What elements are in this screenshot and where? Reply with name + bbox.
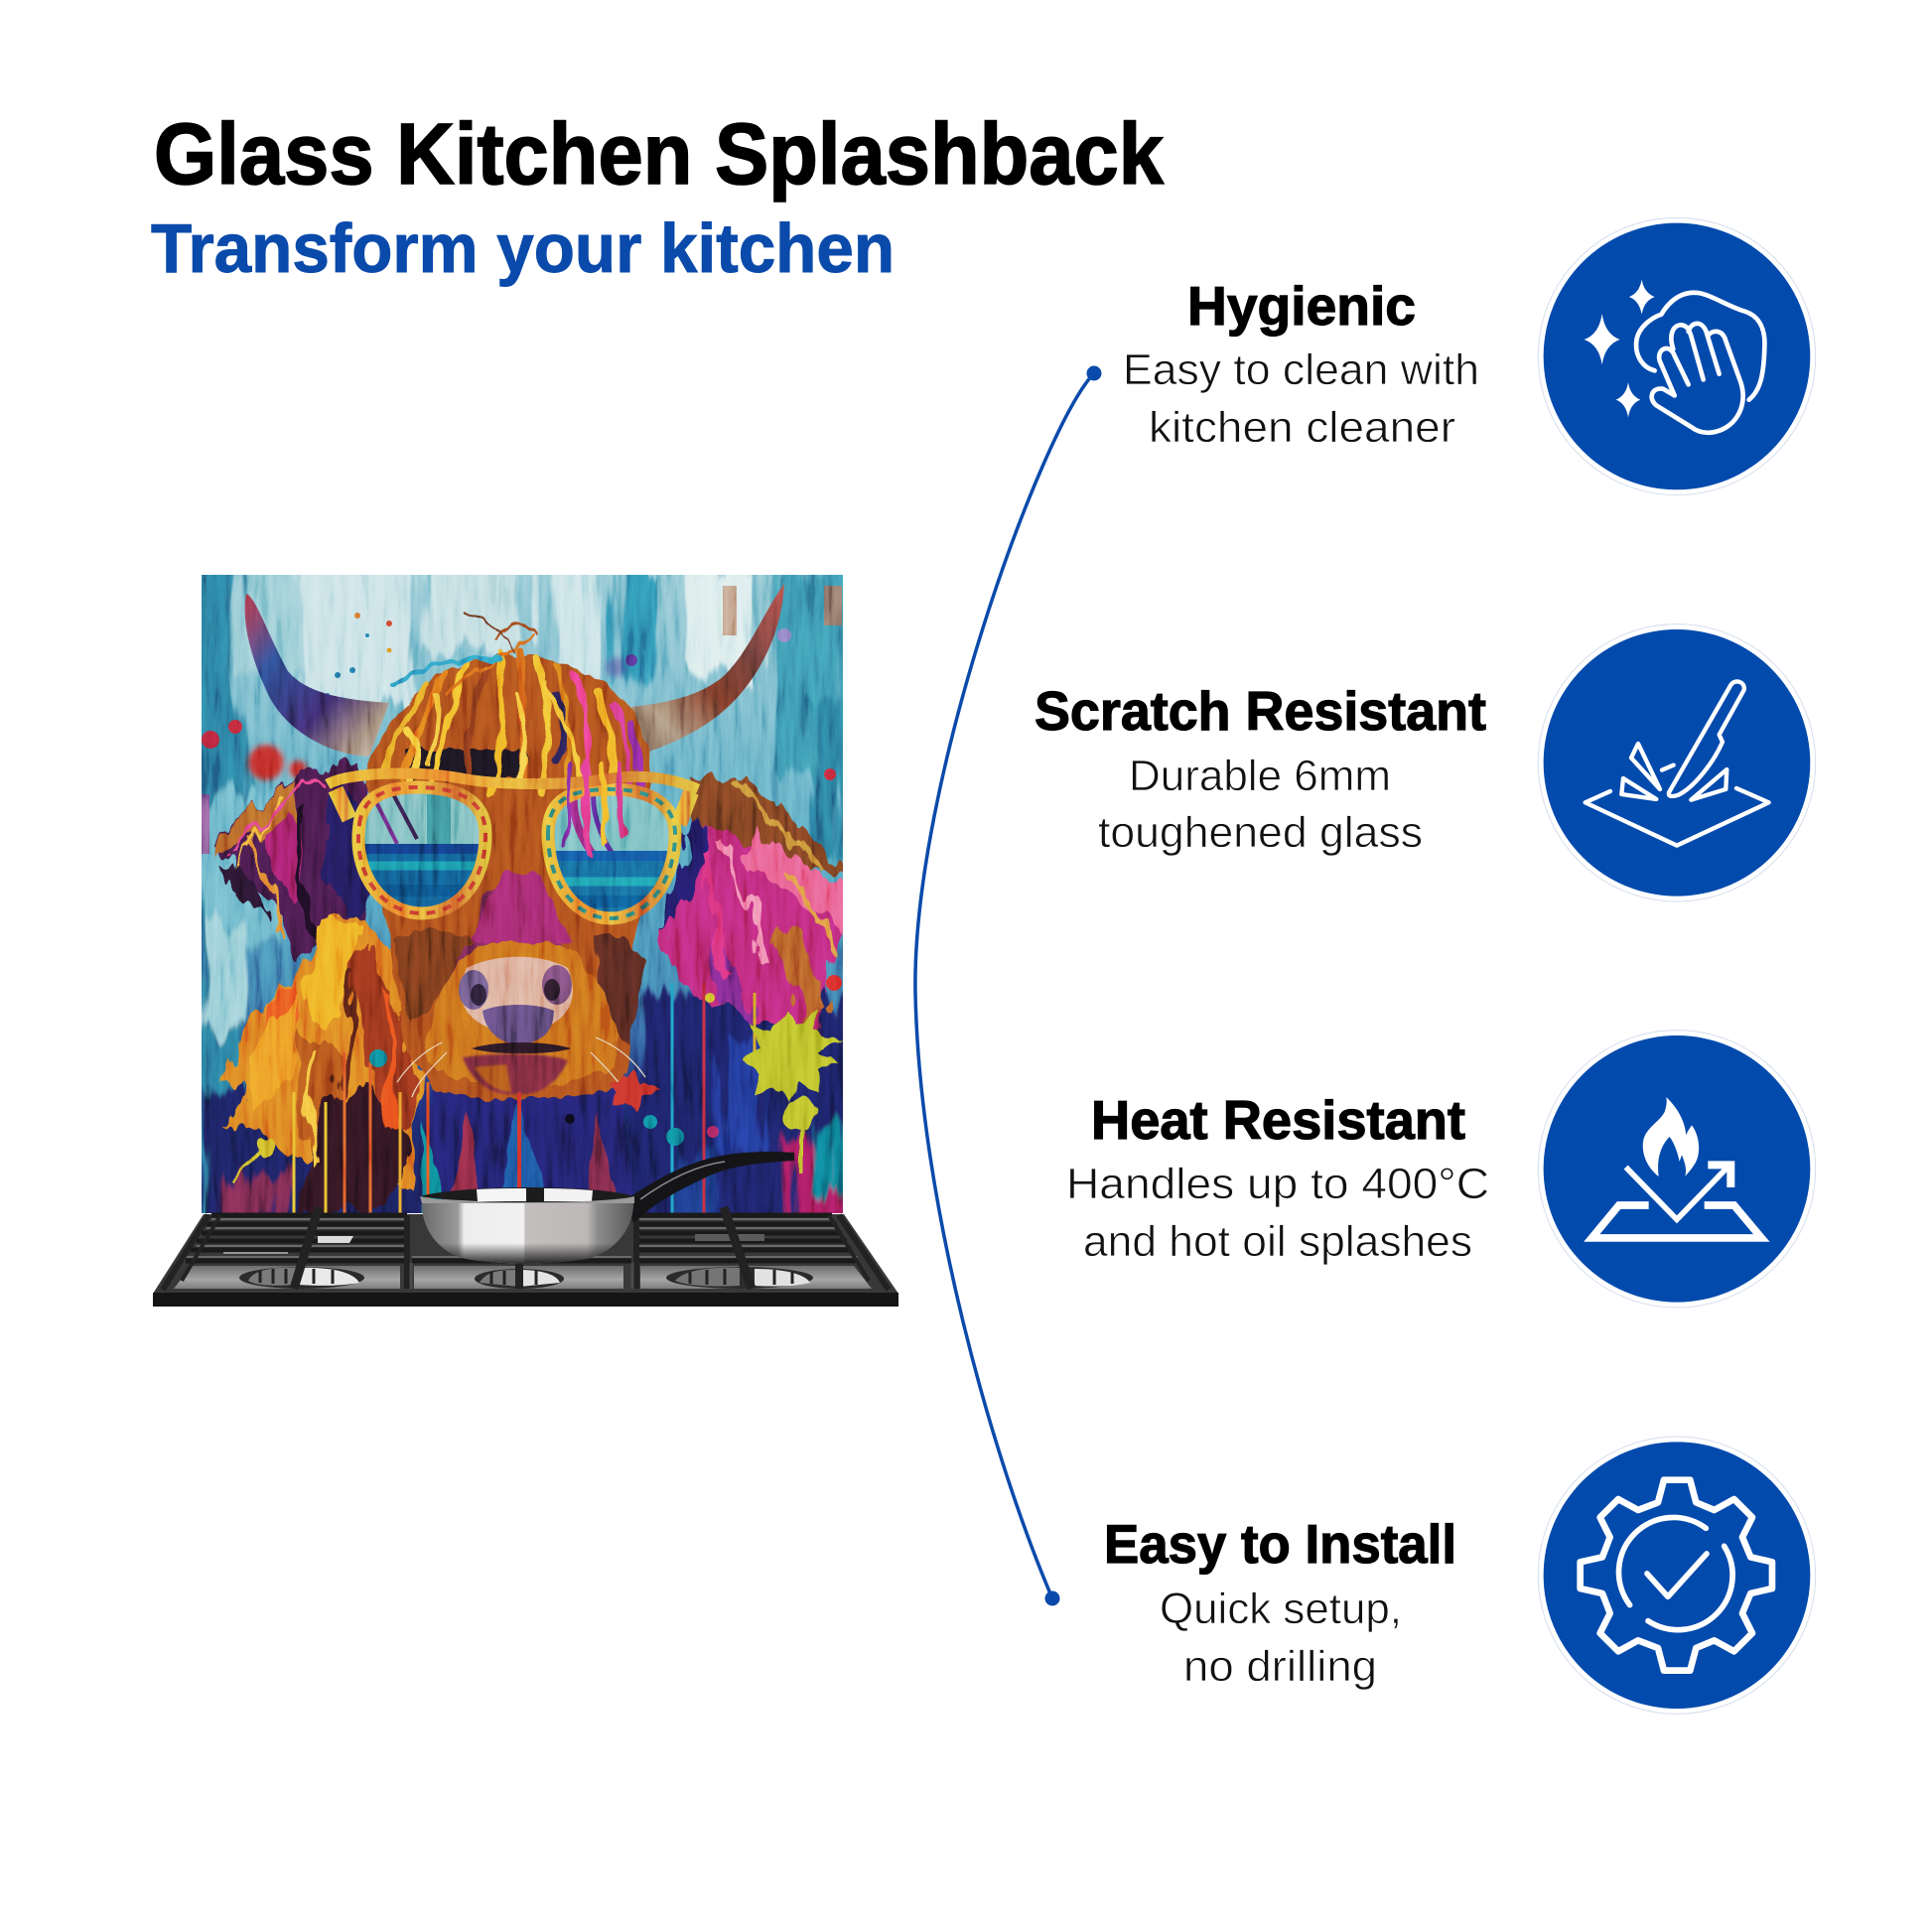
handle: [625, 1152, 794, 1223]
frying pan: [420, 1152, 794, 1263]
grate bars: [186, 1215, 858, 1261]
left horn: [245, 594, 389, 757]
sunglasses: [328, 773, 698, 920]
left lens: [365, 794, 479, 907]
icon: knife on glass: [1538, 624, 1816, 901]
feature: Hygienic: Easy to clean with: [1123, 345, 1479, 394]
feature: Easy to Install: [1104, 1513, 1456, 1691]
grate highlights: [186, 1219, 858, 1257]
feature: Scratch Resistant: Durable 6mm: [1129, 752, 1391, 800]
burners: [239, 1234, 813, 1289]
feature: Easy to Install: Quick setup,: [1160, 1585, 1402, 1633]
feature: Heat Resistant: [1066, 1089, 1489, 1266]
right horn: [631, 584, 784, 755]
neck and lower paint: [417, 1087, 635, 1221]
paint drips: [294, 983, 755, 1213]
title: Glass Kitchen Splashback: [154, 106, 1165, 203]
feature: Easy to Install: no drilling: [1183, 1642, 1377, 1691]
blue paint blots: [369, 993, 719, 1146]
icon: flame on surface with reflect arrow: [1538, 1031, 1816, 1308]
feature: Hygienic: Hygienic: [1187, 275, 1416, 337]
subtitle: Transform your kitchen: [151, 209, 895, 287]
right lens: [554, 796, 669, 911]
cooktop: [153, 1207, 898, 1307]
feature: Heat Resistant: Heat Resistant: [1091, 1089, 1465, 1151]
feature: Easy to Install: Easy to Install: [1104, 1513, 1456, 1575]
brush texture overlay: [202, 575, 843, 1213]
front edge: [153, 1293, 898, 1307]
feature: Hygienic: kitchen cleaner: [1149, 403, 1455, 452]
feature: Hygienic: [1123, 275, 1479, 452]
muzzle and nose: [397, 941, 645, 1097]
hair strands on top of the head: [381, 612, 645, 798]
side hair: right: [655, 776, 849, 1042]
paint splatter dots: [202, 586, 842, 991]
grate verticals and edges: [163, 1207, 889, 1290]
frame: [328, 773, 698, 918]
steel plates: [174, 1266, 872, 1289]
icon: hand wiping with sparkles: [1538, 217, 1816, 495]
feature: Heat Resistant: and hot oil splashes: [1083, 1217, 1472, 1266]
side hair: lower left orange mass: [220, 918, 422, 1211]
feature: Heat Resistant: Handles up to 400°C: [1066, 1160, 1489, 1208]
hair falling over right lens: [566, 759, 623, 854]
side hair: left upper: [213, 764, 369, 958]
head mass: [367, 655, 650, 1112]
feature: Scratch Resistant: [1035, 680, 1486, 857]
connector curve: [915, 365, 1102, 1606]
yellow paint splash: [230, 1008, 840, 1181]
rim: [420, 1187, 634, 1202]
feature: Scratch Resistant: toughened glass: [1098, 808, 1423, 857]
red paint splash: [611, 1068, 659, 1114]
panel: splashback painting of highland cow: [189, 556, 854, 1231]
icon: gear with check mark: [1538, 1437, 1816, 1714]
hob body: [153, 1214, 898, 1307]
bowl: [422, 1199, 633, 1263]
feature: Scratch Resistant: Scratch Resistant: [1035, 680, 1486, 742]
